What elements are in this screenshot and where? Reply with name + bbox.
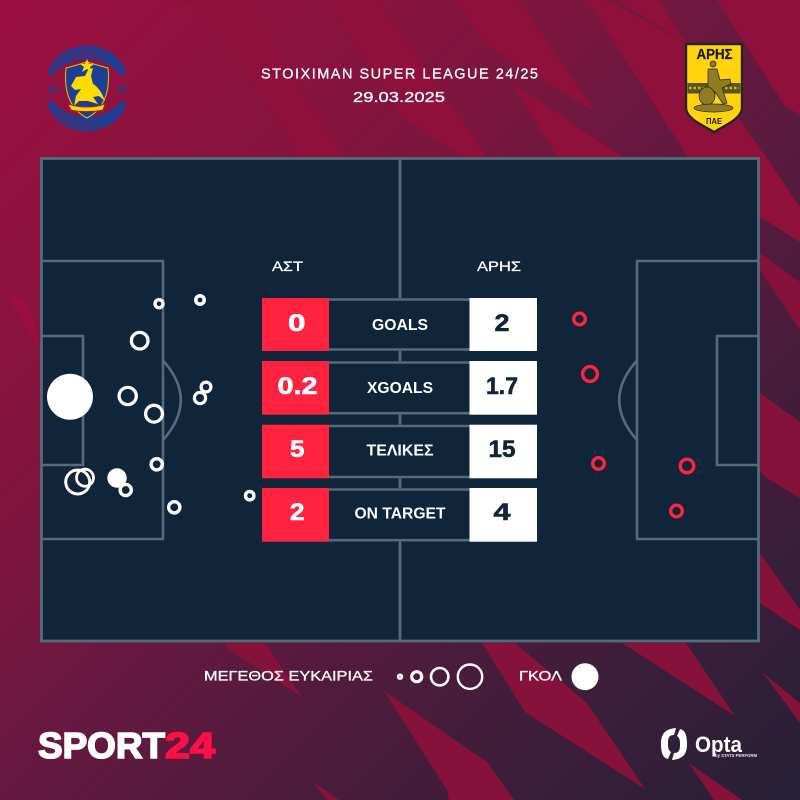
row: xgoals: 0.2 — [278, 373, 318, 400]
row: shots: 15 — [488, 436, 516, 463]
shot map: Asteras shots — [47, 296, 254, 513]
heading: competition and date: STOIXIMAN SUPER LEAGUE 24/25 — [261, 66, 538, 82]
logo: Opta — [661, 728, 757, 760]
row: shots: ΤΕΛΙΚΕΣ — [366, 442, 434, 460]
logo: Aris crest: ΑΡΗΣ — [696, 46, 732, 63]
row: shots: 5 — [290, 436, 304, 463]
legend: chance size and goal — [204, 663, 598, 690]
row: goals: 2 — [494, 310, 510, 337]
row: on target: ON TARGET — [354, 506, 446, 522]
logo: Asteras Tripolis crest: 19 — [47, 84, 58, 96]
heading: competition and date: 29.03.2025 — [353, 90, 445, 106]
row: on target: 2 — [290, 499, 304, 526]
stats table — [262, 298, 537, 542]
logo: Aris crest — [686, 44, 742, 132]
left penalty area — [41, 261, 181, 539]
logo: Asteras Tripolis crest: 31 — [117, 84, 128, 96]
logo: Opta: Opta — [695, 732, 743, 757]
legend: chance size and goal: ΓΚΟΛ — [519, 668, 563, 684]
logo: Asteras Tripolis crest: ASTERAS — [51, 49, 105, 73]
logo: Sport24: 24 — [165, 725, 215, 766]
logo: Asteras Tripolis crest: TRIPOLIS F.C. — [56, 110, 105, 128]
right penalty area — [619, 261, 759, 539]
row: on target: 4 — [494, 499, 511, 526]
row: goals: GOALS — [372, 317, 428, 334]
row: on target — [262, 488, 537, 542]
row: goals: 0 — [288, 310, 306, 337]
logo: Asteras Tripolis crest — [47, 46, 128, 131]
legend: chance size and goal: ΜΕΓΕΘΟΣ ΕΥΚΑΙΡΙΑΣ — [204, 668, 373, 684]
team labels: ΑΣΤ — [272, 258, 304, 274]
team labels: ΑΡΗΣ — [477, 258, 521, 274]
row: xgoals: 1.7 — [486, 373, 518, 400]
logo: Opta: by STATS PERFORM — [715, 753, 757, 758]
logo: Sport24: SPORT — [38, 725, 165, 766]
row: shots — [262, 425, 537, 478]
team labels — [272, 258, 521, 274]
logo: Aris crest: ΠΑΕ — [706, 116, 722, 126]
row: xgoals — [262, 361, 537, 415]
panel: pitch — [41, 158, 759, 641]
row: goals — [262, 298, 537, 351]
heading: competition and date — [261, 66, 538, 106]
shot map: Aris shots — [574, 313, 694, 517]
row: xgoals: XGOALS — [367, 380, 433, 397]
